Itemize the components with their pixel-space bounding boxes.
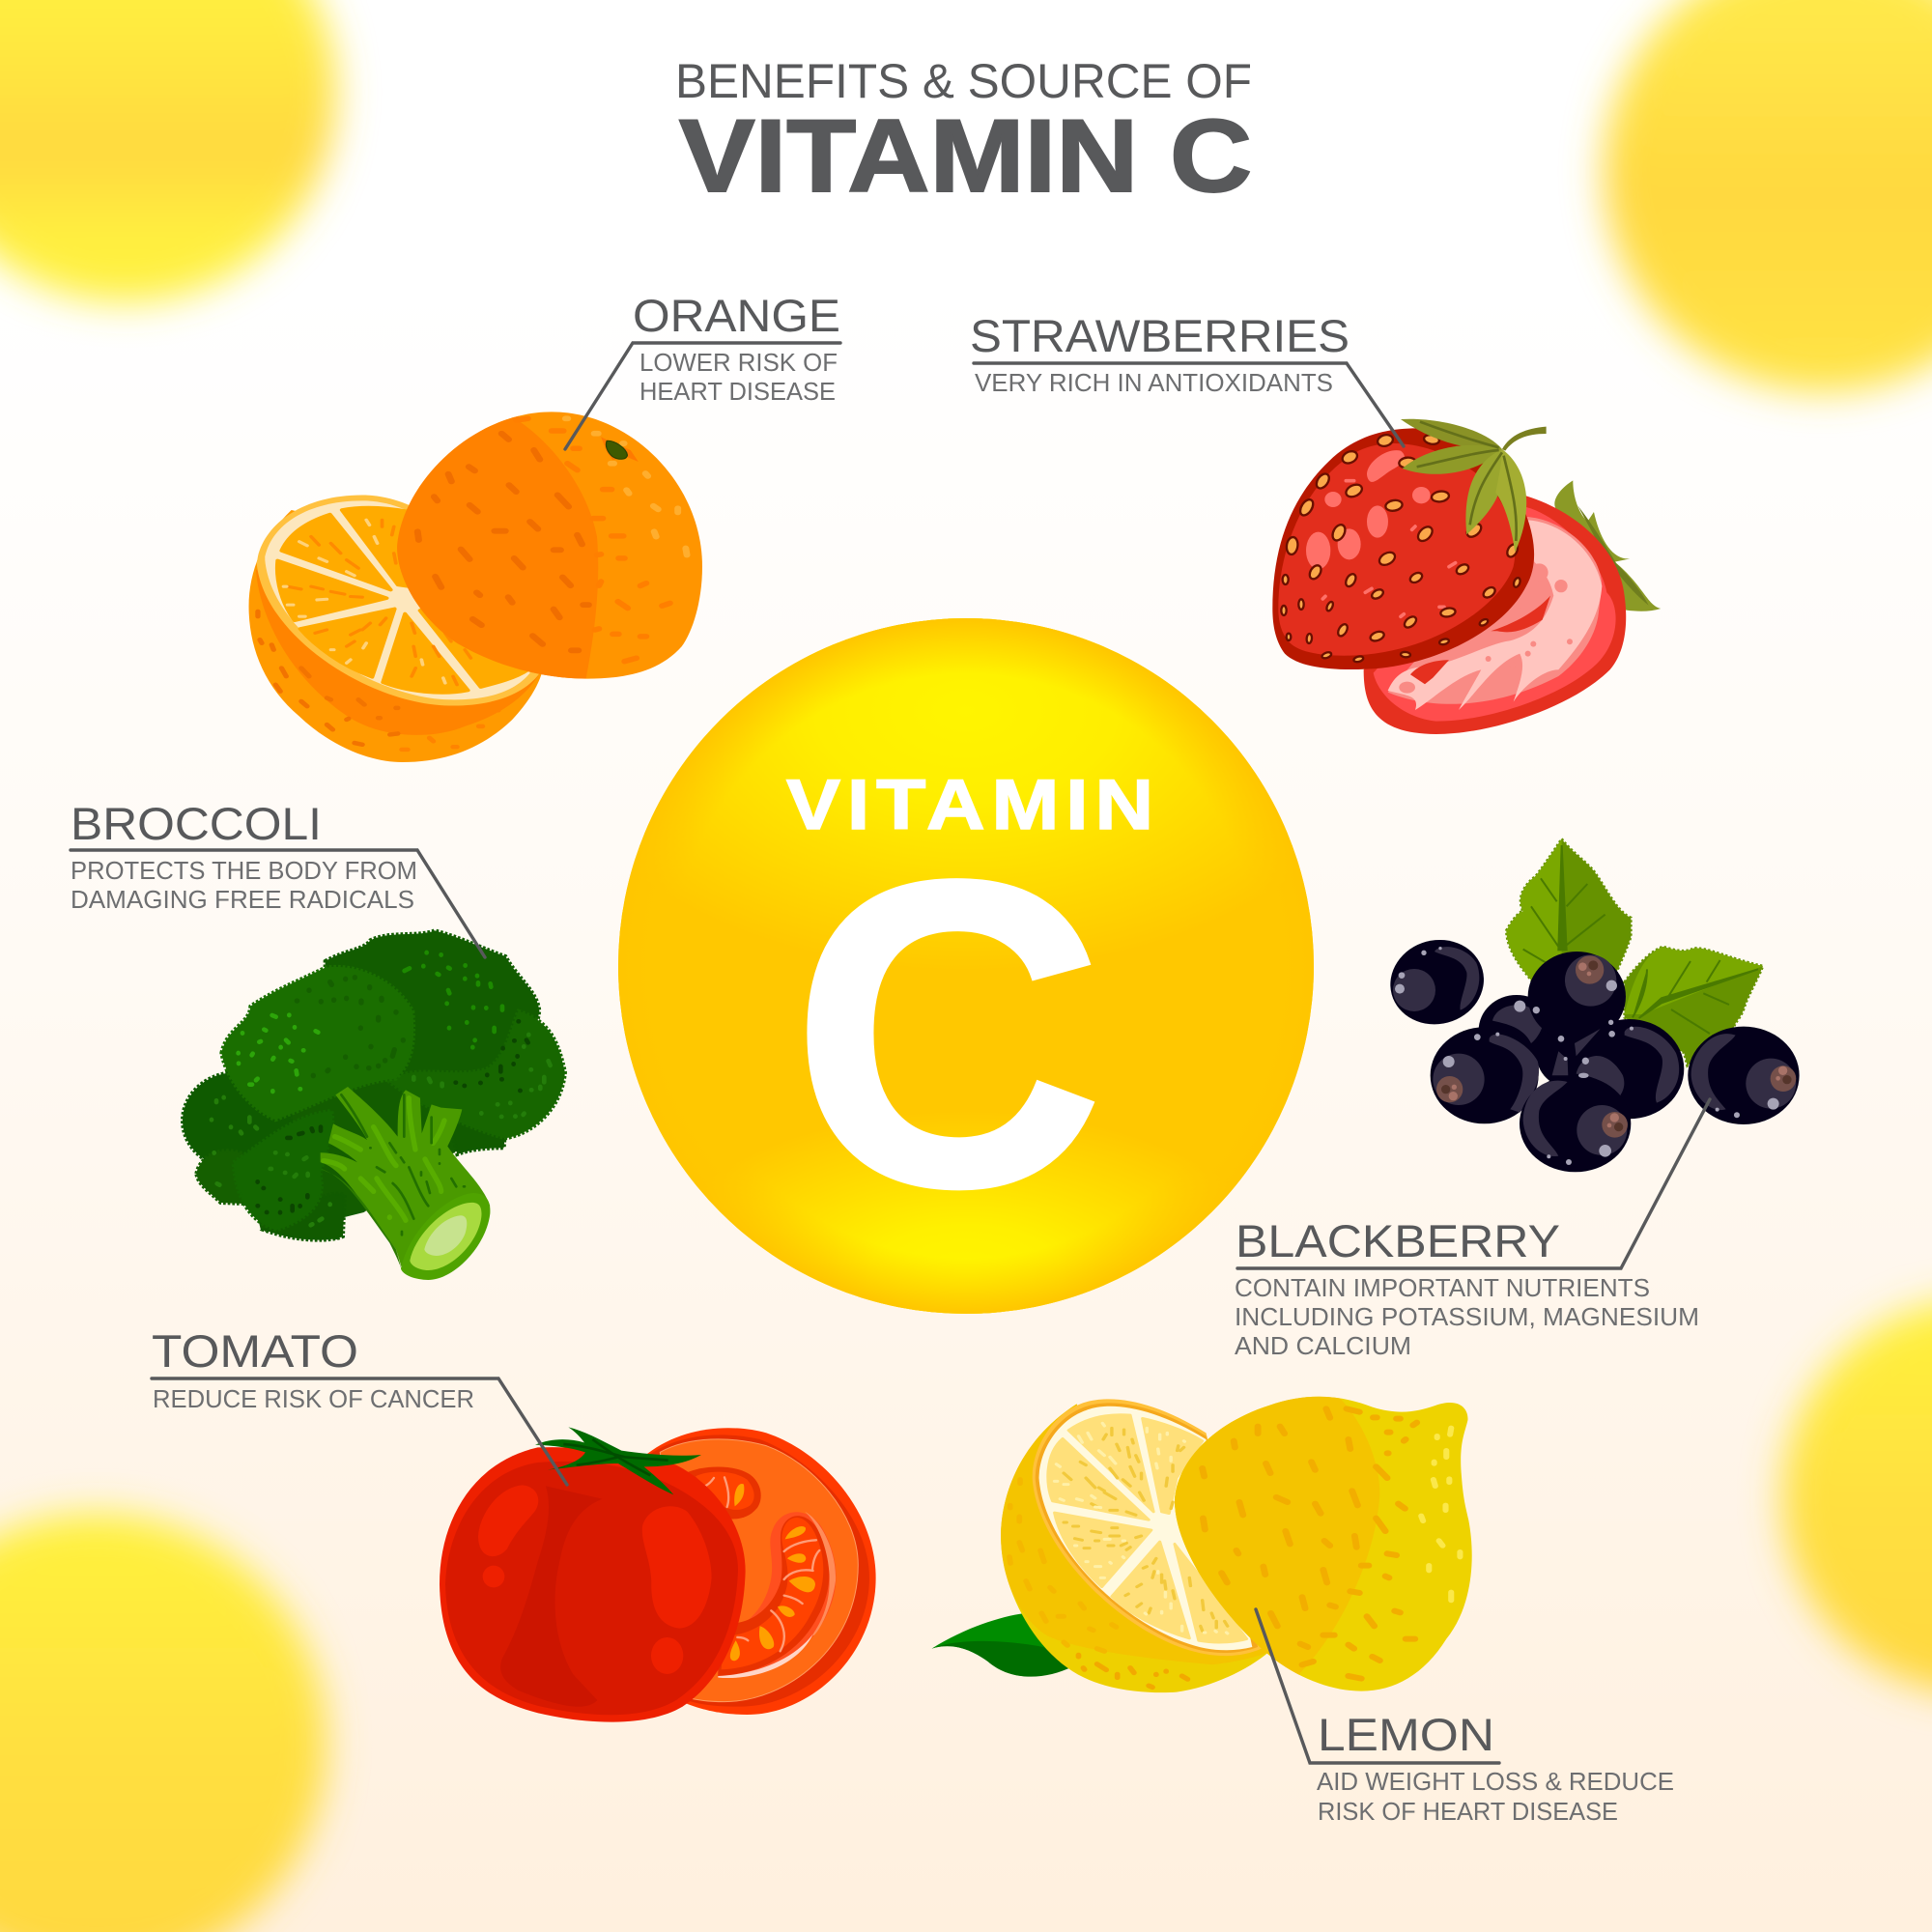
whole orange (397, 412, 702, 679)
fruit: tomato (440, 1427, 876, 1722)
label: orange: HEART DISEASE (639, 379, 836, 406)
blackberry leaf, right (1625, 947, 1763, 1065)
label: broccoli: DAMAGING FREE RADICALS (71, 887, 414, 914)
strawberry calyx (1401, 419, 1547, 553)
berry details (1395, 947, 1779, 1165)
lemon leaf (932, 1613, 1073, 1676)
label: tomato: TOMATO (152, 1325, 358, 1377)
central vitamin C circle: VITAMIN (786, 766, 1160, 844)
label: lemon: LEMON (1318, 1709, 1494, 1760)
broccoli cut end (401, 1193, 490, 1280)
label: broccoli (71, 798, 485, 957)
label: orange: LOWER RISK OF (639, 350, 838, 377)
whole lemon (1175, 1397, 1472, 1691)
label: lemon (1256, 1609, 1674, 1826)
label: blackberry: AND CALCIUM (1235, 1333, 1411, 1360)
central vitamin C circle (618, 618, 1314, 1314)
sliced strawberry (1364, 496, 1626, 734)
label: broccoli: BROCCOLI (71, 798, 322, 849)
label: lemon: AID WEIGHT LOSS & REDUCE (1317, 1769, 1674, 1796)
berries (1380, 929, 1800, 1172)
right floret (389, 1011, 565, 1138)
fruit: broccoli (183, 930, 565, 1280)
title: VITAMIN C (679, 98, 1252, 213)
title (675, 54, 1252, 213)
main floret (221, 967, 413, 1120)
label: broccoli: PROTECTS THE BODY FROM (71, 858, 417, 885)
lower floret (234, 1111, 332, 1230)
label: orange: ORANGE (633, 290, 840, 341)
label: blackberry: BLACKBERRY (1236, 1215, 1560, 1266)
title: BENEFITS & SOURCE OF (675, 54, 1252, 108)
label: orange (565, 290, 840, 449)
label: blackberry: CONTAIN IMPORTANT NUTRIENTS (1235, 1275, 1650, 1302)
tomato slice (647, 1428, 876, 1715)
back florets (326, 930, 539, 1152)
tomato seed chambers (683, 1467, 761, 1519)
label: blackberry (1235, 1099, 1710, 1360)
broccoli dots (239, 1015, 318, 1092)
label: lemon: RISK OF HEART DISEASE (1318, 1799, 1618, 1826)
broccoli stalk (321, 1087, 490, 1270)
label: tomato (152, 1325, 567, 1485)
fruit: lemon (932, 1381, 1472, 1703)
back strawberry leaf (1554, 480, 1661, 611)
fruit: orange (249, 412, 702, 762)
half lemon body (1001, 1404, 1269, 1692)
label: strawberries: STRAWBERRIES (970, 310, 1350, 361)
fruit: blackberry (1380, 838, 1800, 1172)
whole strawberry (1272, 428, 1534, 669)
whole tomato (440, 1447, 746, 1722)
fruit: strawberries (1272, 419, 1661, 734)
tomato stem (535, 1427, 701, 1494)
blackberry leaf, upper (1506, 838, 1631, 982)
label: blackberry: INCLUDING POTASSIUM, MAGNESIUM (1235, 1304, 1699, 1331)
label: strawberries: VERY RICH IN ANTIOXIDANTS (975, 370, 1333, 397)
central vitamin C circle: C (791, 790, 1104, 1277)
label: strawberries (970, 310, 1404, 446)
label: tomato: REDUCE RISK OF CANCER (153, 1386, 474, 1413)
